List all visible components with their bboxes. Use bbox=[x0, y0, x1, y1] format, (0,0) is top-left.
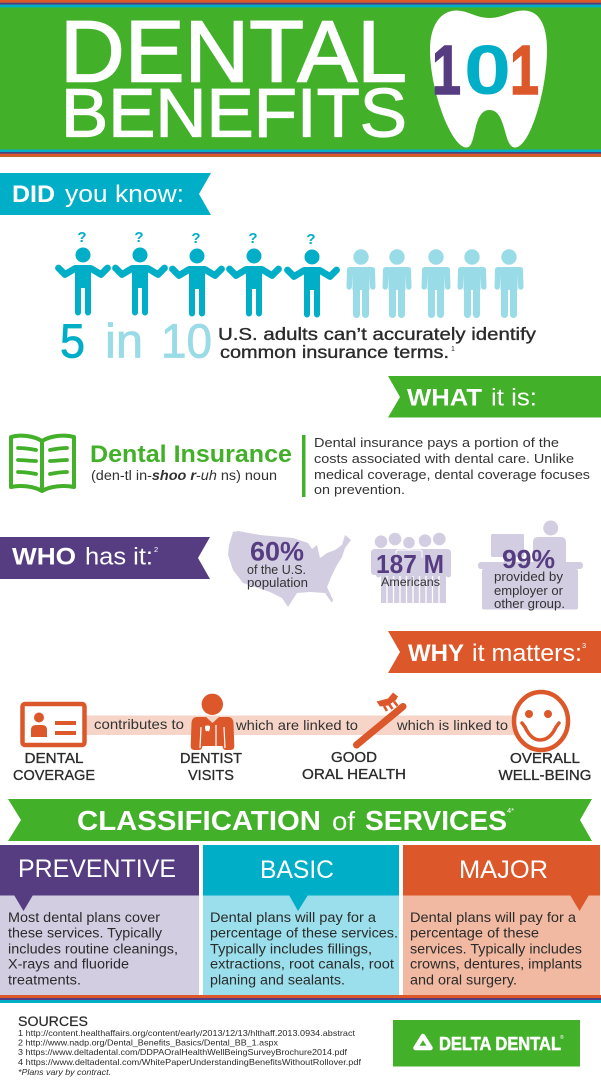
text: preventive description: these services. Typically bbox=[8, 926, 162, 940]
title bbox=[60, 4, 407, 152]
heading banner: classification of services bbox=[8, 799, 592, 841]
statistic: 5 in 10 bbox=[60, 316, 212, 368]
sources: *Plans vary by contract. bbox=[18, 1067, 111, 1077]
flow label: which is linked to: which is linked to bbox=[396, 717, 508, 733]
text: basic description: Typically includes fillings, bbox=[210, 941, 372, 956]
text: preventive description: X-rays and fluoride bbox=[8, 956, 129, 972]
title: DENTAL bbox=[60, 4, 407, 101]
icon: smiley face bbox=[514, 692, 568, 750]
text: preventive description: Most dental plans cover bbox=[8, 910, 161, 925]
text: statistic description bbox=[218, 324, 536, 362]
text: basic description: planing and sealants. bbox=[210, 972, 345, 987]
stat: 99 percent with desk icon: employer or bbox=[494, 584, 563, 598]
label: good oral health: GOOD bbox=[331, 750, 377, 766]
section banner: did you know bbox=[0, 173, 211, 215]
label: dentist visits bbox=[180, 751, 242, 784]
logo: delta dental: ® bbox=[560, 1034, 564, 1041]
icon: insurance card bbox=[22, 704, 84, 745]
text: preventive description: treatments. bbox=[8, 972, 81, 987]
panel: basic: BASIC bbox=[260, 856, 334, 884]
pictogram: 5 in 10 people: ? bbox=[306, 231, 316, 248]
heading banner: classification of services: SERVICES bbox=[365, 805, 507, 836]
panel: major bbox=[403, 845, 600, 995]
text: definition: on prevention. bbox=[314, 482, 405, 497]
pictogram: 5 in 10 people: ? bbox=[248, 230, 258, 247]
sources bbox=[18, 1014, 362, 1077]
label: dentist visits: VISITS bbox=[188, 768, 234, 784]
section banner: did you know: DID bbox=[12, 181, 55, 208]
text: major description bbox=[410, 910, 582, 987]
label: overall well-being: OVERALL bbox=[510, 751, 580, 767]
section banner: why it matters bbox=[388, 631, 601, 673]
flow connector band bbox=[85, 716, 520, 735]
label: good oral health: ORAL HEALTH bbox=[302, 767, 406, 783]
stat: 99 percent with desk icon: provided by bbox=[494, 570, 564, 584]
pictogram: 5 in 10 people: ? bbox=[77, 229, 87, 246]
text: preventive description: includes routine cleanings, bbox=[8, 941, 178, 956]
statistic: 5 in 10: in bbox=[105, 316, 143, 368]
stat: 99 percent with desk icon: 99% bbox=[502, 544, 555, 574]
text: basic description bbox=[210, 910, 398, 987]
icon: tooth with 101: 0 bbox=[464, 31, 511, 109]
text: pronunciation: (den-tl in- shoo r-uh ns) noun bbox=[91, 468, 277, 483]
heading banner: classification of services: CLASSIFICATION bbox=[77, 805, 321, 836]
logo: delta dental bbox=[393, 1020, 580, 1066]
header banner bbox=[0, 0, 601, 157]
stat: 187 million with crowd icon: 187 M bbox=[376, 549, 444, 579]
heading banner: classification of services: 4* bbox=[507, 806, 514, 815]
stat: 187 million with crowd icon bbox=[371, 533, 451, 604]
section banner: what it is: WHAT bbox=[407, 384, 482, 412]
flow label: which are linked to: which are linked to bbox=[235, 717, 358, 733]
section banner: who has it bbox=[0, 537, 210, 579]
panel: preventive: PREVENTIVE bbox=[18, 855, 176, 883]
label: dentist visits: DENTIST bbox=[180, 751, 242, 767]
sources: SOURCES bbox=[18, 1014, 88, 1029]
text: basic description: percentage of these services. bbox=[210, 926, 398, 940]
text: preventive description bbox=[8, 910, 178, 987]
section banner: why it matters: WHY bbox=[408, 640, 464, 667]
logo: delta dental: DELTA DENTAL bbox=[439, 1034, 561, 1054]
text: definition bbox=[314, 435, 591, 497]
text: statistic description: common insurance terms. bbox=[220, 342, 449, 362]
pictogram: 5 in 10 people: ? bbox=[191, 230, 201, 247]
pictogram: 5 in 10 people: ? bbox=[134, 229, 144, 246]
section banner: did you know: you know: bbox=[65, 181, 184, 208]
text: statistic description: U.S. adults can’t accurately identify bbox=[218, 324, 536, 344]
icon: tooth with 101: 1 bbox=[432, 31, 461, 109]
section banner: who has it: WHO bbox=[12, 544, 76, 570]
text: definition: medical coverage, dental coverage focuses bbox=[314, 467, 591, 482]
pictogram: 5 in 10 people bbox=[58, 229, 524, 318]
statistic: 5 in 10: 10 bbox=[161, 316, 212, 368]
text: major description: crowns, dentures, implants bbox=[410, 956, 582, 972]
icon: tooth with 101 bbox=[430, 10, 547, 148]
icon: dentist bbox=[191, 694, 234, 750]
panel: preventive bbox=[0, 845, 199, 995]
label: overall well-being: WELL-BEING bbox=[498, 768, 592, 784]
label: dental coverage: COVERAGE bbox=[13, 768, 95, 784]
section banner: who has it: 2 bbox=[154, 545, 158, 554]
label: overall well-being bbox=[498, 751, 592, 784]
text: statistic description: 1 bbox=[451, 346, 455, 353]
icon: tooth with 101: 1 bbox=[510, 31, 539, 109]
stat: 99 percent with desk icon bbox=[478, 520, 583, 611]
icon: open book bbox=[11, 436, 74, 491]
section banner: what it is: it is: bbox=[491, 384, 537, 412]
text: major description: services. Typically includes bbox=[410, 941, 582, 956]
section banner: who has it: has it: bbox=[85, 544, 153, 570]
heading: dental insurance: Dental Insurance bbox=[90, 441, 292, 468]
panel: major: MAJOR bbox=[459, 856, 548, 884]
section banner: why it matters: it matters: bbox=[472, 640, 582, 667]
stat: 60 percent with US map: 60% bbox=[250, 536, 304, 566]
label: dental coverage bbox=[13, 751, 95, 784]
text: major description: Dental plans will pay for a bbox=[410, 910, 577, 925]
sources: 2 http://www.nadp.org/Dental_Benefits_Basics/Dental_BB_1.aspx bbox=[18, 1038, 279, 1048]
label: good oral health bbox=[302, 750, 406, 783]
heading banner: classification of services: of bbox=[332, 806, 356, 836]
text: definition: Dental insurance pays a portion of the bbox=[314, 435, 559, 450]
sources: 4 https://www.deltadental.com/WhitePaperUnderstandingBenefitsWithoutRollover.pdf bbox=[18, 1057, 362, 1067]
stat: 60 percent with US map bbox=[228, 531, 351, 607]
title: BENEFITS bbox=[61, 75, 407, 152]
heading: dental insurance bbox=[90, 441, 292, 483]
stat: 99 percent with desk icon: other group. bbox=[494, 597, 565, 611]
section banner: why it matters: 3 bbox=[582, 641, 586, 650]
icon: toothbrush bbox=[356, 692, 403, 745]
label: dental coverage: DENTAL bbox=[24, 751, 84, 767]
stat: 187 million with crowd icon: Americans bbox=[381, 575, 440, 589]
text: basic description: extractions, root canals, root bbox=[210, 956, 394, 972]
stat: 60 percent with US map: population bbox=[247, 576, 308, 590]
text: major description: percentage of these bbox=[410, 926, 539, 940]
panel: basic bbox=[203, 845, 399, 995]
text: major description: and oral surgery. bbox=[410, 972, 517, 987]
statistic: 5 in 10: 5 bbox=[60, 316, 85, 368]
text: basic description: Dental plans will pay for a bbox=[210, 910, 377, 925]
text: definition: costs associated with dental care. Unlike bbox=[314, 451, 574, 466]
section banner: what it is bbox=[388, 376, 601, 418]
stat: 60 percent with US map: of the U.S. bbox=[247, 563, 306, 577]
flow label: contributes to: contributes to bbox=[94, 716, 184, 732]
sources: 1 http://content.healthaffairs.org/content/early/2013/12/13/hlthaff.2013.0934.abstract bbox=[18, 1028, 356, 1038]
sources: 3 https://www.deltadental.com/DDPAOralHealthWellBeingSurveyBrochure2014.pdf bbox=[18, 1047, 348, 1057]
